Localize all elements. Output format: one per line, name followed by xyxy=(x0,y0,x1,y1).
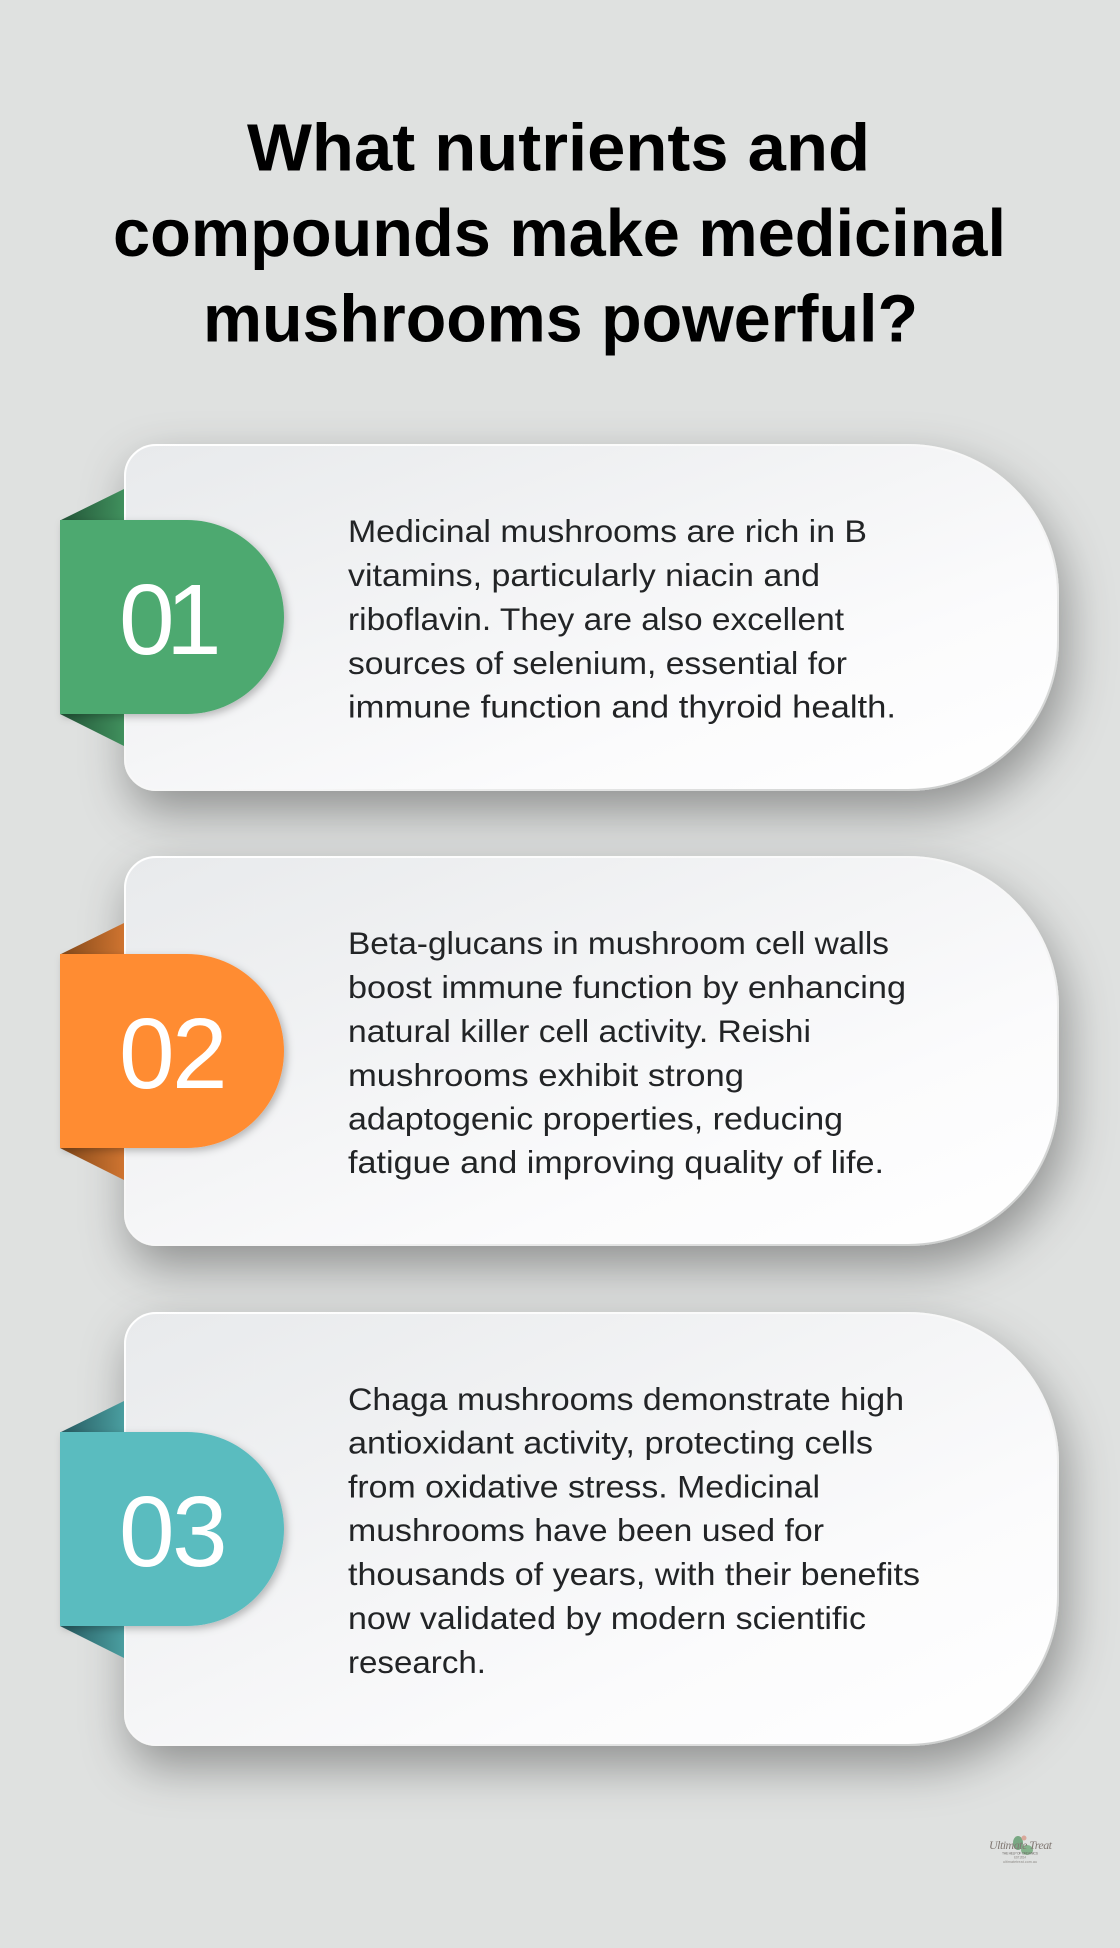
text block 03: thousands of years, with their benefits xyxy=(348,1556,920,1592)
logo: ultimatetreat.com.au xyxy=(1003,1860,1037,1864)
number badge 03 xyxy=(60,1432,284,1626)
text block 03: mushrooms have been used for xyxy=(348,1512,824,1548)
text block 01: riboflavin. They are also excellent xyxy=(348,601,844,637)
text block 01: sources of selenium, essential for xyxy=(348,645,847,681)
text block 03 xyxy=(348,1381,920,1680)
logo: EST. 2014 xyxy=(1014,1856,1026,1860)
text block 02 xyxy=(348,925,906,1180)
text block 03: now validated by modern scientific xyxy=(348,1600,866,1636)
number 03: 03 xyxy=(119,1476,228,1588)
number badge 01 xyxy=(60,520,284,714)
text block 02: boost immune function by enhancing xyxy=(348,969,906,1005)
number badge 02 xyxy=(60,954,284,1148)
icon: leaves xyxy=(1013,1836,1033,1855)
text block 02: Beta-glucans in mushroom cell walls xyxy=(348,925,889,961)
ribbon fold top 02 xyxy=(61,923,124,954)
text block 03: antioxidant activity, protecting cells xyxy=(348,1424,873,1460)
text block 01: immune function and thyroid health. xyxy=(348,688,896,724)
ribbon fold top 01 xyxy=(61,489,124,520)
title: What nutrients and xyxy=(247,110,870,186)
panel: step 03 xyxy=(60,1313,1058,1745)
text block 03: Chaga mushrooms demonstrate high xyxy=(348,1381,904,1417)
number 02: 02 xyxy=(119,998,228,1110)
ribbon fold top 03 xyxy=(61,1401,124,1432)
text block 02: natural killer cell activity. Reishi xyxy=(348,1013,811,1049)
text block 01: vitamins, particularly niacin and xyxy=(348,557,820,593)
title: mushrooms powerful? xyxy=(203,282,918,356)
logo xyxy=(989,1836,1053,1864)
panel: step 02 xyxy=(60,857,1058,1245)
title: compounds make medicinal xyxy=(113,196,1006,271)
logo: Ultimate Treat xyxy=(989,1838,1053,1852)
text block 02: fatigue and improving quality of life. xyxy=(348,1144,884,1180)
ribbon fold bottom 01 xyxy=(60,714,124,746)
title xyxy=(113,110,1006,356)
panel: step 01 xyxy=(60,445,1058,790)
text block 02: adaptogenic properties, reducing xyxy=(348,1100,843,1136)
logo: THE HELP OF ORGANICS xyxy=(1002,1852,1039,1856)
card 03 xyxy=(125,1313,1058,1745)
card 02 xyxy=(125,857,1058,1245)
ribbon fold bottom 03 xyxy=(60,1626,124,1658)
text block 03: research. xyxy=(348,1644,486,1680)
card 01 xyxy=(125,445,1058,790)
ribbon fold bottom 02 xyxy=(60,1148,124,1180)
text block 01 xyxy=(348,513,896,724)
text block 03: from oxidative stress. Medicinal xyxy=(348,1468,820,1504)
number 01: 01 xyxy=(119,564,222,676)
text block 01: Medicinal mushrooms are rich in B xyxy=(348,513,867,549)
text block 02: mushrooms exhibit strong xyxy=(348,1057,744,1093)
